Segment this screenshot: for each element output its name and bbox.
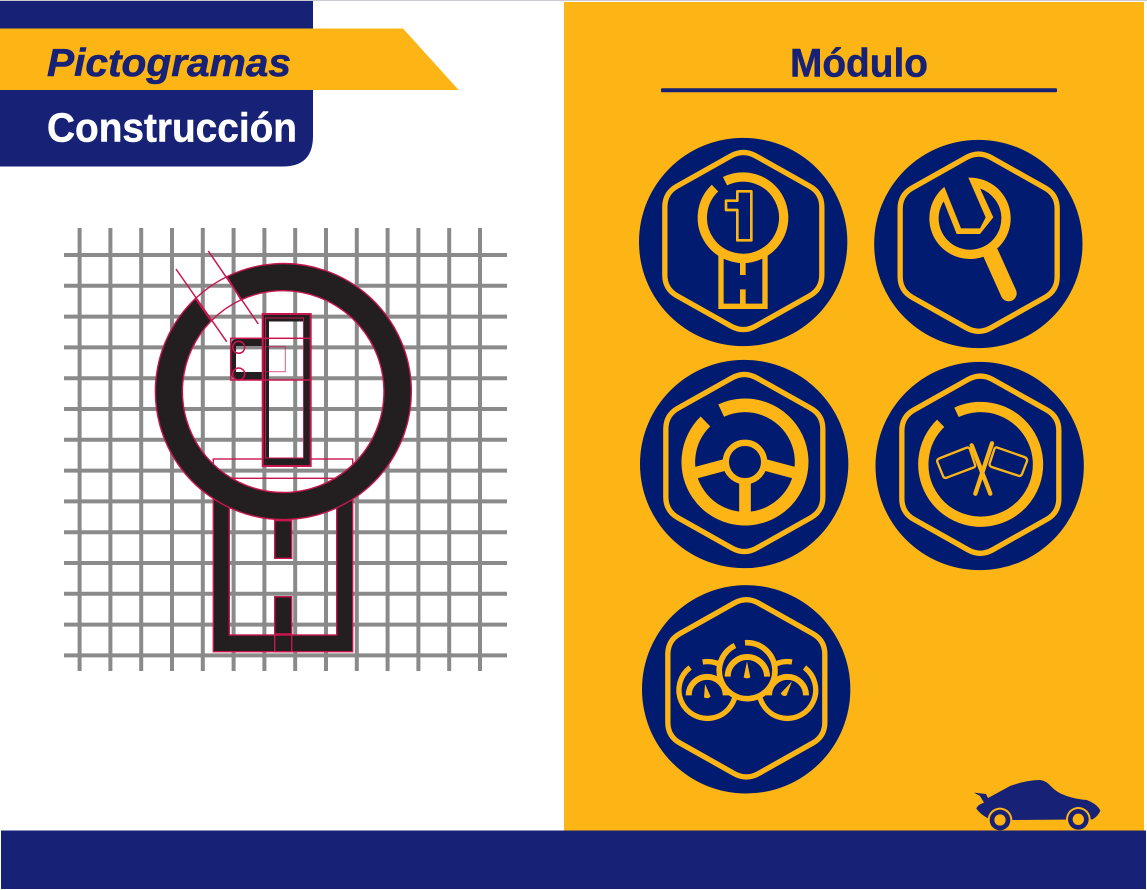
icon: sports car [974,780,1100,832]
icon: side mirrors [875,362,1084,570]
heading: Módulo: Módulo [790,42,928,86]
icon: gear lever with number one [639,138,847,346]
footer bar [1,830,1146,889]
construction grid [64,228,507,671]
heading rule [661,88,1057,92]
icon: dashboard gauges [642,585,850,793]
construction drawing: number one [231,314,311,466]
header banner [0,1,459,166]
icon: steering wheel [640,360,848,568]
construction drawing: H gate base [213,459,353,652]
subtitle: Construcción: Construcción [47,104,297,150]
construction drawing: ring [155,251,411,520]
panel: módulo [564,2,1144,831]
icon: wrench [874,140,1082,348]
title: Pictogramas: Pictogramas [47,42,291,85]
